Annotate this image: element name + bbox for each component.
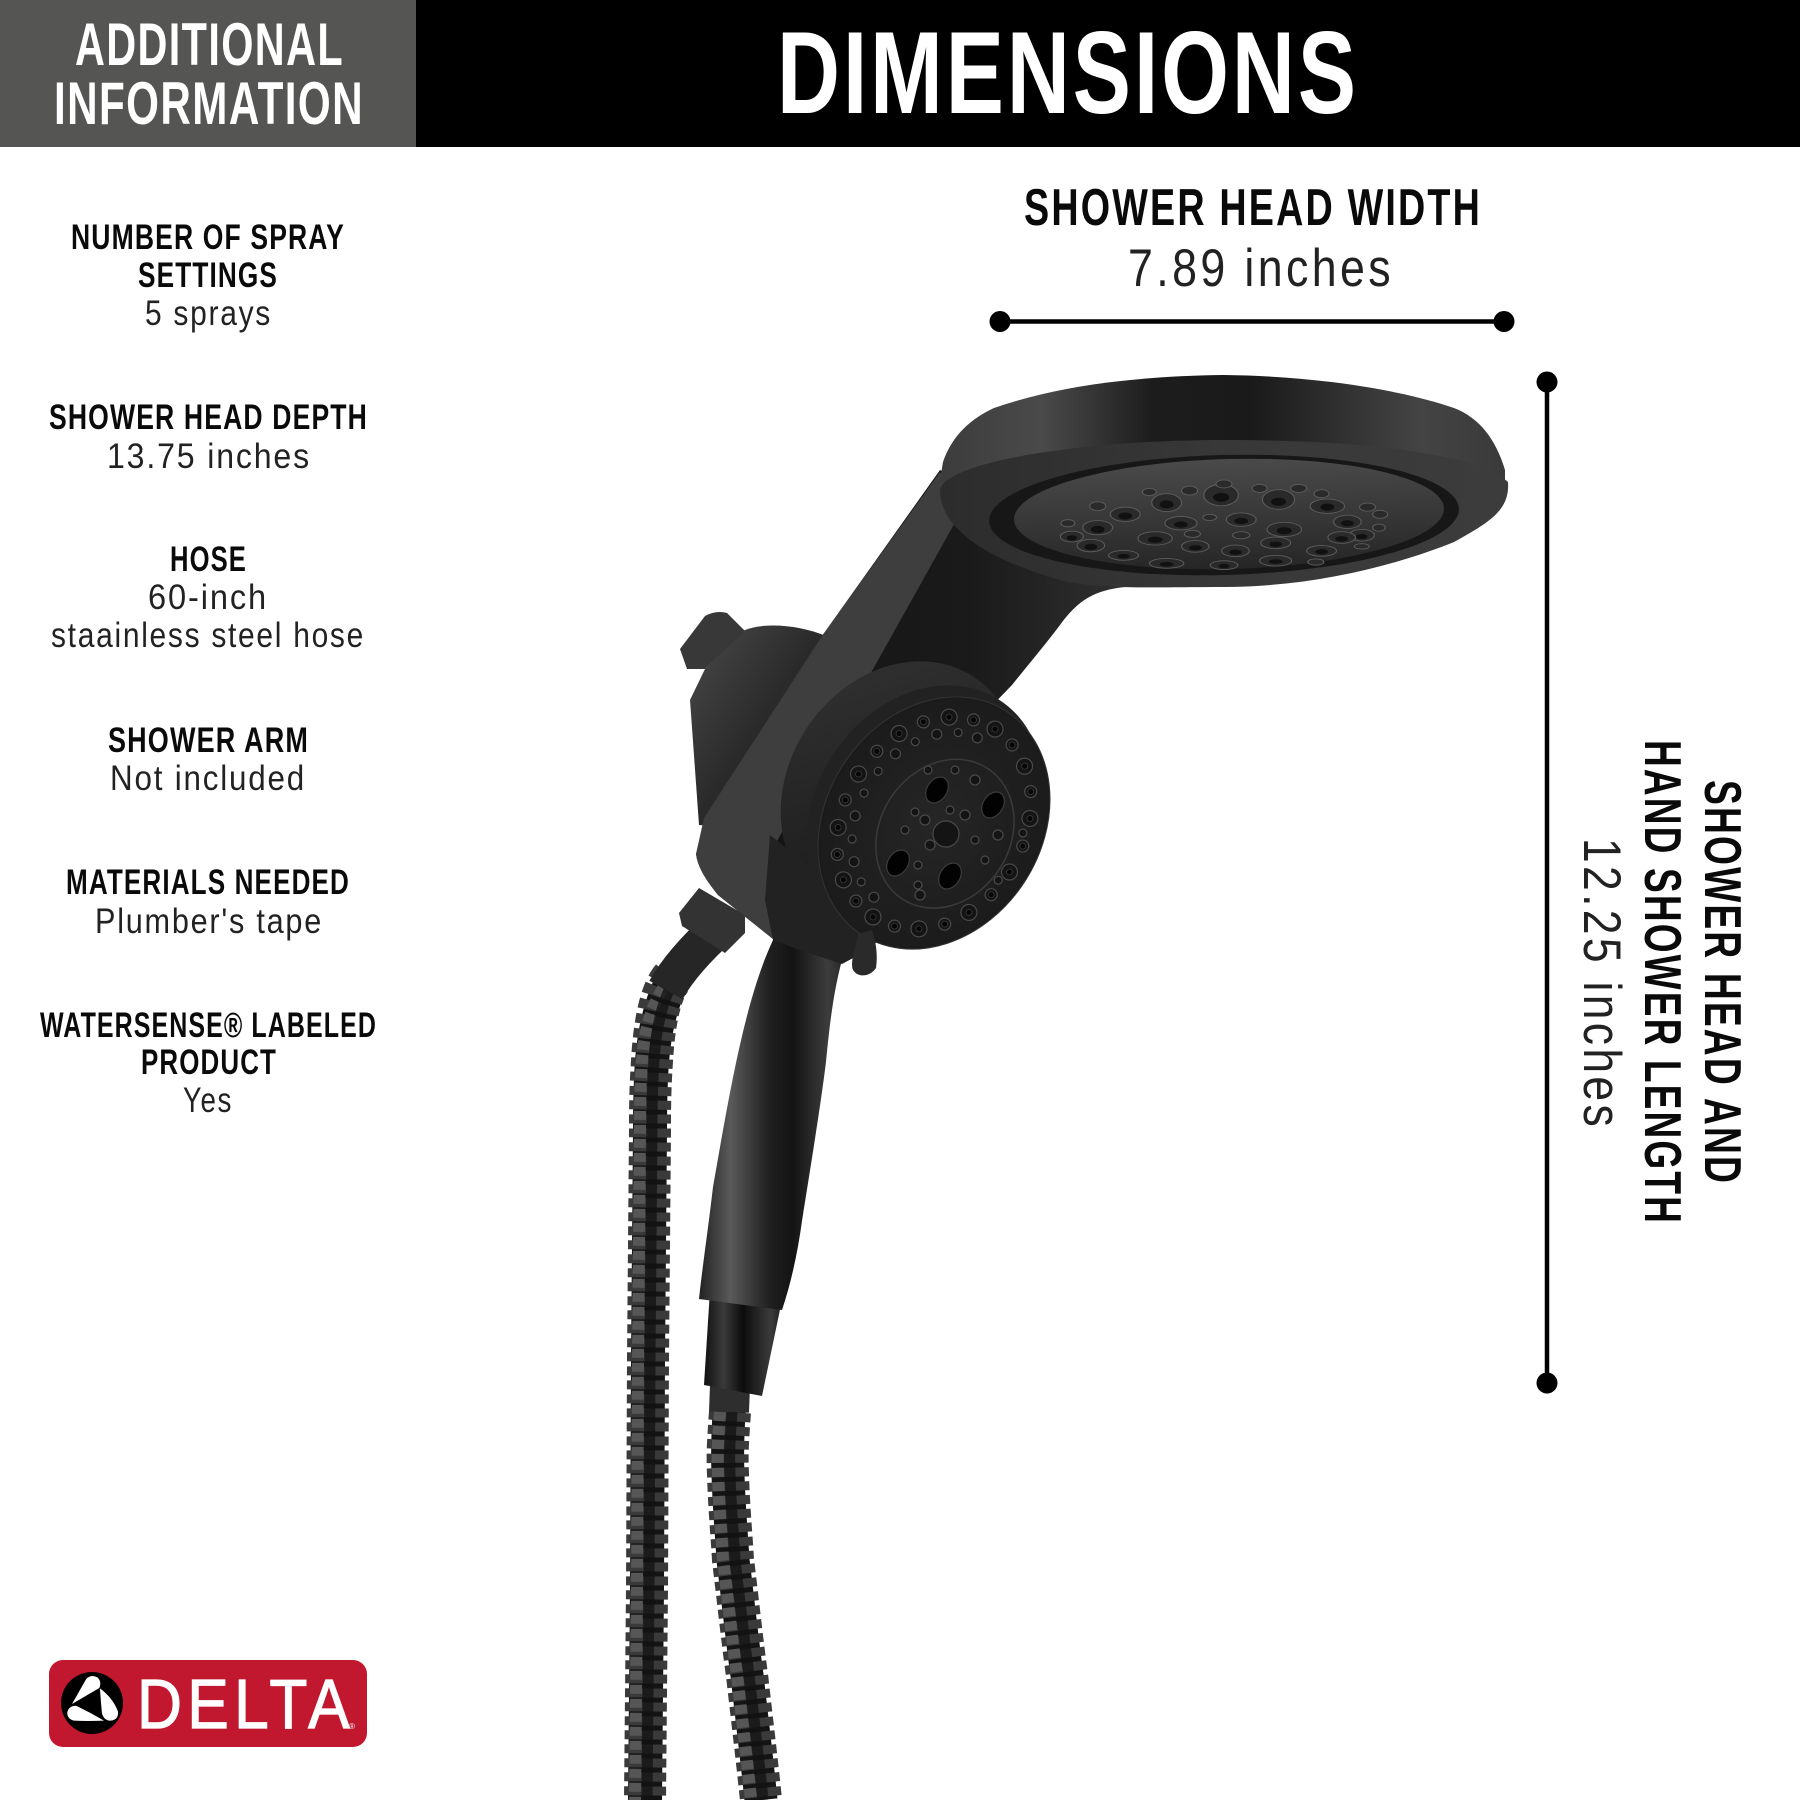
spec: number of spray settings [71, 218, 345, 333]
delta logo [49, 1660, 367, 1747]
hand shower handle [699, 917, 842, 1310]
spec: number of spray settings: NUMBER OF SPRAY [71, 218, 345, 257]
lower hose [718, 1385, 763, 1800]
spec: hose: HOSE [170, 540, 247, 579]
spec: shower head depth [49, 398, 368, 476]
header: dimensions title: DIMENSIONS [777, 7, 1359, 138]
dimension: shower head and hand shower length: 12.25 inches [1572, 838, 1631, 1130]
rain head nozzles [1060, 480, 1388, 570]
rain head rim [940, 440, 1508, 587]
left hose [635, 925, 722, 1800]
spec: materials needed: Plumber's tape [95, 902, 323, 941]
header: dimensions title [416, 0, 1800, 147]
shower product illustration [635, 375, 1508, 1800]
handle collar [704, 1290, 782, 1396]
threaded nipple [680, 612, 745, 669]
header: additional information: INFORMATION [54, 70, 364, 137]
spec: shower arm: Not included [110, 759, 306, 798]
spec: materials needed [66, 863, 350, 941]
dimension: shower head width [990, 179, 1514, 332]
spec: watersense labeled product: Yes [183, 1081, 233, 1120]
delta logo: ® [349, 1722, 355, 1731]
spec: watersense labeled product [40, 1006, 377, 1120]
hand shower back housing [733, 616, 1067, 964]
wall mount cone [690, 625, 826, 830]
dimension: shower head and hand shower length: HAND SHOWER LENGTH [1633, 740, 1691, 1225]
spec: watersense labeled product: PRODUCT [141, 1043, 277, 1082]
spec: watersense labeled product: WATERSENSE® LABELED [40, 1006, 377, 1045]
spec: number of spray settings: SETTINGS [138, 256, 278, 295]
hand shower rim [758, 640, 1092, 990]
hose nut [679, 888, 745, 953]
hand shower face [771, 653, 1097, 993]
rain head top surface [940, 375, 1505, 560]
middle nozzle ring [813, 696, 1063, 955]
rain head recess [988, 449, 1460, 581]
outer nozzle ring [786, 669, 1082, 977]
spec: hose [51, 540, 365, 655]
spec: shower head depth: 13.75 inches [107, 437, 311, 476]
spec: shower arm [108, 721, 309, 798]
header: additional information: ADDITIONAL [75, 11, 344, 78]
arm front strip [696, 472, 962, 939]
hand shower bridge [765, 835, 890, 964]
dimension: shower head and hand shower length [1536, 372, 1751, 1394]
spec: hose: staainless steel hose [51, 616, 365, 655]
header: additional information [0, 0, 416, 147]
dimension: shower head width: 7.89 inches [1128, 239, 1394, 298]
spec: hose: 60-inch [148, 578, 268, 617]
spray lever [852, 930, 877, 975]
spec: shower head depth: SHOWER HEAD DEPTH [49, 398, 368, 437]
rain head [940, 375, 1508, 587]
hand shower inner nozzles [882, 766, 1009, 900]
dimension: shower head and hand shower length: SHOWER HEAD AND [1693, 780, 1751, 1185]
spec: number of spray settings: 5 sprays [145, 294, 272, 333]
delta logo: DELTA [137, 1665, 355, 1743]
spec: shower arm: SHOWER ARM [108, 721, 309, 760]
spec list [40, 218, 377, 1120]
rain head spray plate [1013, 453, 1445, 575]
spec: materials needed: MATERIALS NEEDED [66, 863, 350, 902]
dimension: shower head width: SHOWER HEAD WIDTH [1024, 179, 1482, 237]
upper arm body [696, 470, 1150, 939]
